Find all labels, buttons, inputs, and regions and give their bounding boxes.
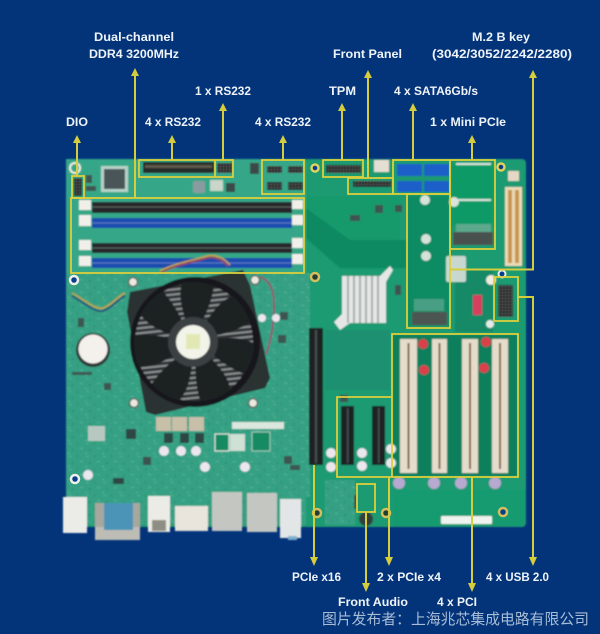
USB header and DIP switch <box>473 275 513 328</box>
label: TPM: TPM <box>329 84 356 98</box>
fan hub <box>168 317 218 367</box>
SATA connectors <box>397 164 449 192</box>
arrow: 4 x PCI <box>468 477 476 592</box>
label: 4 x SATA: 4 x SATA6Gb/s <box>394 84 478 98</box>
top components <box>86 163 259 193</box>
motherboard <box>63 159 526 540</box>
label: DDR4 speed: DDR4 3200MHz <box>89 47 179 61</box>
arrow: M.2 B key <box>450 70 537 270</box>
small components <box>72 205 402 509</box>
PCIe x16 slot <box>309 328 323 465</box>
label: 2 x PCIe x4: 2 x PCIe x4 <box>377 570 441 584</box>
rear I/O connectors <box>63 492 301 540</box>
labels <box>66 30 572 609</box>
label: 4 x USB 2.0: 4 x USB 2.0 <box>486 570 549 584</box>
arrow: 4 x USB 2.0 <box>518 296 537 566</box>
arrow: DIO <box>73 135 81 176</box>
fan rim <box>130 277 260 407</box>
board colour regions <box>66 159 525 526</box>
label: DIO: DIO <box>66 115 88 129</box>
label: mini PCIe: 1 x Mini PCIe <box>430 115 506 129</box>
label: 4 x RS232 right: 4 x RS232 <box>255 115 311 129</box>
callout boxes <box>71 160 518 512</box>
CPU cooler <box>127 270 270 415</box>
PCI slots <box>400 339 508 473</box>
DIMM clips <box>79 200 303 266</box>
watermark: 图片发布者：上海兆芯集成电路有限公司 <box>322 608 589 629</box>
arrow: dual-channel DDR4 <box>131 68 139 198</box>
label: 4 x RS232 left: 4 x RS232 <box>145 115 201 129</box>
arrow: 4 x SATA <box>409 103 417 160</box>
label: 1 x RS232: 1 x RS232 <box>195 84 251 98</box>
label: dual-channel DDR4: Dual-channel <box>94 30 174 44</box>
label: front panel: Front Panel <box>333 47 402 61</box>
label: front audio: Front Audio <box>338 595 408 609</box>
TPM and front panel headers <box>326 160 519 187</box>
label: M.2 B key: M.2 B key <box>472 30 530 44</box>
arrow: mini PCIe <box>468 135 476 160</box>
arrow: front panel <box>364 70 372 178</box>
mounting holes <box>70 164 507 517</box>
arrow: 4 x RS232 left <box>168 135 176 160</box>
label: M.2 sizes: (3042/3052/2242/2280) <box>432 47 572 61</box>
DIO header <box>74 178 82 196</box>
coin battery <box>76 333 110 367</box>
M.2 and mini PCIe slots <box>412 163 493 325</box>
serial headers <box>143 162 303 190</box>
DIMM slots <box>92 202 292 268</box>
PCIe x4 slots <box>341 406 385 465</box>
hole: top-left <box>70 163 80 173</box>
arrow: TPM <box>338 103 346 160</box>
ATX power connector <box>505 187 522 266</box>
arrow: 1 x RS232 <box>219 103 227 160</box>
power components <box>88 417 204 484</box>
fan cable <box>72 255 274 354</box>
fan blades <box>131 282 255 405</box>
heatsink base <box>127 270 270 415</box>
capacitors <box>83 314 501 526</box>
PCI slot area <box>393 335 517 476</box>
certification marks and labels <box>215 422 492 524</box>
label: PCIe x16: PCIe x16 <box>292 570 341 584</box>
fan bowl <box>135 283 253 401</box>
top-left chip <box>101 166 128 192</box>
arrow: PCIe x16 <box>310 465 318 566</box>
cooler mounts <box>128 276 260 408</box>
arrow: 2 x PCIe x4 <box>385 477 393 566</box>
arrow: front audio <box>362 512 370 592</box>
chipset heatsink <box>334 266 393 330</box>
board base <box>66 159 526 527</box>
label: 4 x PCI: 4 x PCI <box>437 595 477 609</box>
arrow: 4 x RS232 right <box>279 135 287 160</box>
